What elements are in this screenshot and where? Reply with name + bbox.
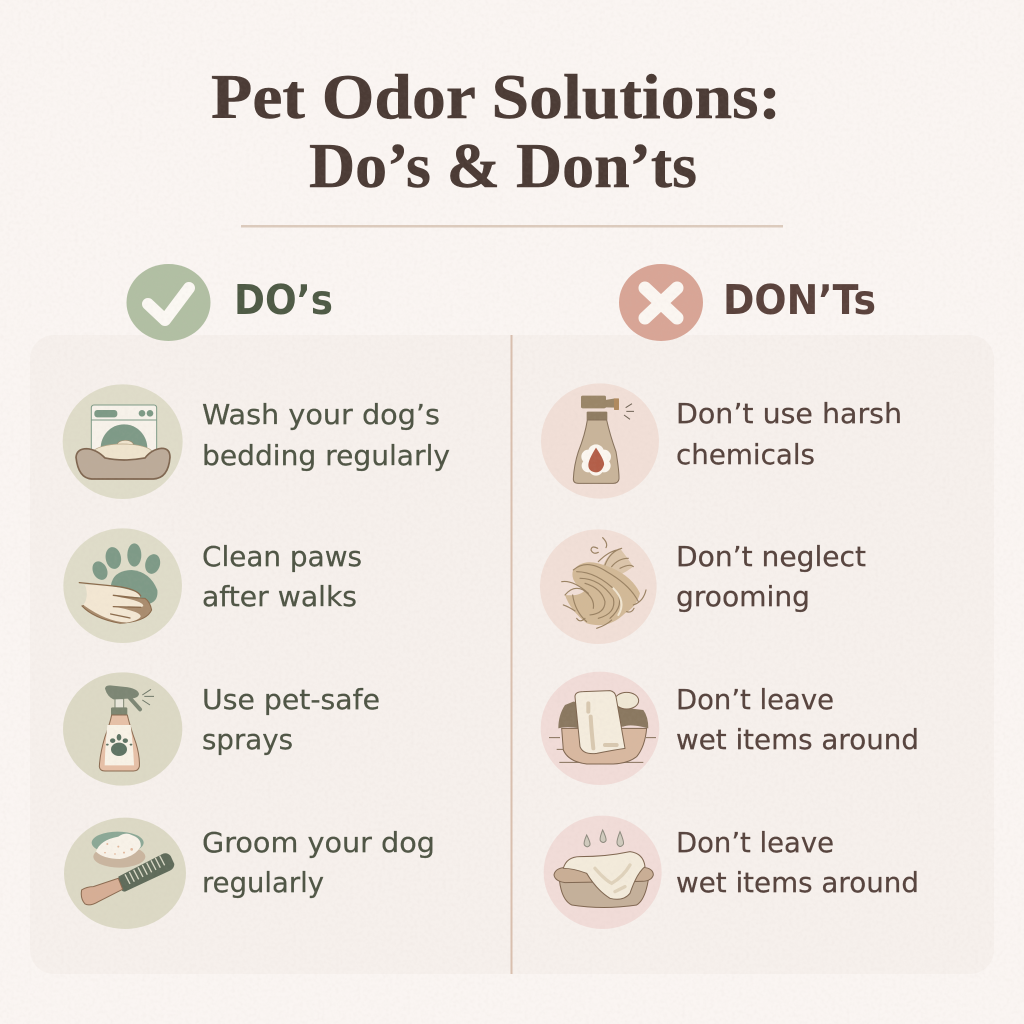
icon: chemical spray bottle xyxy=(541,383,659,499)
item: clean paws xyxy=(63,528,362,643)
header: do's xyxy=(126,264,333,341)
icon: comb and fur bowl xyxy=(64,818,186,929)
item: neglect grooming xyxy=(540,529,866,644)
item: pet-safe sprays xyxy=(63,672,380,786)
text: groom dog: regularly xyxy=(202,866,324,899)
column: do's xyxy=(63,264,450,929)
item: wet items in bowl xyxy=(544,816,919,929)
item: wet items in basket xyxy=(541,672,919,785)
icon: wet towel on basket xyxy=(541,672,659,785)
title xyxy=(211,61,781,201)
header: don'ts xyxy=(619,264,876,341)
text: wet items in basket xyxy=(676,683,919,756)
text: wash bedding: Wash your dog’s xyxy=(202,398,440,431)
column: don'ts xyxy=(540,264,919,929)
text: harsh chemicals xyxy=(676,397,902,471)
text: wash bedding xyxy=(202,398,450,472)
panel: comparison background xyxy=(30,335,994,974)
icon: cross badge xyxy=(619,264,703,341)
text: clean paws xyxy=(202,540,362,613)
text: clean paws: after walks xyxy=(202,580,357,613)
text: groom dog: Groom your dog xyxy=(202,826,435,859)
item: groom dog xyxy=(64,818,435,929)
text: wet items in bowl xyxy=(676,826,919,899)
item: wash bedding xyxy=(63,384,450,499)
text: wet items in bowl: Don’t leave xyxy=(676,826,834,859)
heading: don'ts: DON’Ts xyxy=(723,276,876,324)
text: wet items in bowl: wet items around xyxy=(676,866,919,899)
text: harsh chemicals: Don’t use harsh xyxy=(676,397,902,430)
text: wet items in basket: wet items around xyxy=(676,723,919,756)
text: neglect grooming xyxy=(676,540,866,613)
icon: steaming towel in bowl xyxy=(544,816,662,929)
heading: do's: DO’s xyxy=(234,276,333,324)
text: pet-safe sprays xyxy=(202,683,380,756)
text: harsh chemicals: chemicals xyxy=(676,438,815,471)
text: neglect grooming: grooming xyxy=(676,580,810,613)
item: harsh chemicals xyxy=(541,383,902,499)
icon: dog bed and washer xyxy=(63,384,183,499)
text: wash bedding: bedding regularly xyxy=(202,439,450,472)
text: neglect grooming: Don’t neglect xyxy=(676,540,866,573)
text: pet-safe sprays: sprays xyxy=(202,723,293,756)
icon: paw and hand xyxy=(63,528,182,643)
text: clean paws: Clean paws xyxy=(202,540,362,573)
icon: check mark badge xyxy=(126,264,210,341)
text: wet items in basket: Don’t leave xyxy=(676,683,834,716)
title: Do’s & Don’ts xyxy=(309,130,697,201)
icon: matted fur xyxy=(540,529,657,644)
text: pet-safe sprays: Use pet-safe xyxy=(202,683,380,716)
icon: pet-safe spray bottle xyxy=(63,672,182,786)
text: groom dog xyxy=(202,826,435,899)
title: Pet Odor Solutions: xyxy=(211,61,781,132)
